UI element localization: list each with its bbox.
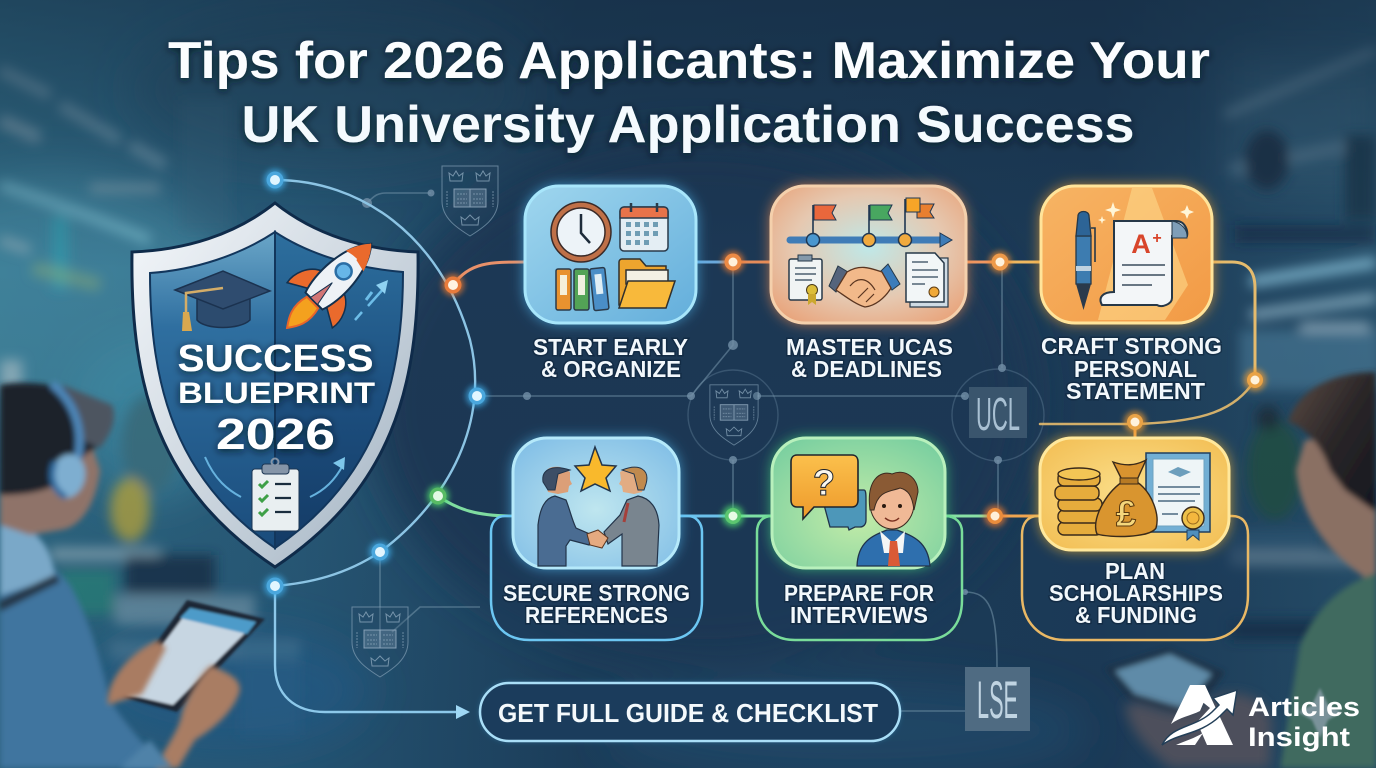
label: INTERVIEWS xyxy=(790,602,928,628)
label: STATEMENT xyxy=(1066,378,1205,404)
icon: handshake xyxy=(829,264,900,307)
label: & ORGANIZE xyxy=(541,356,681,382)
student right with tablet xyxy=(1105,372,1376,768)
label: START EARLY xyxy=(533,334,688,360)
spotlight xyxy=(1098,188,1188,320)
ring nodes xyxy=(264,169,1266,597)
label xyxy=(784,580,934,628)
icon: clock xyxy=(551,202,611,262)
logo: articles insight: Insight xyxy=(1248,722,1350,752)
crest: top xyxy=(442,166,498,236)
logo mark xyxy=(1162,685,1237,745)
shield text xyxy=(178,338,375,459)
icon: clipboard with seal xyxy=(789,255,822,305)
shield ring arc xyxy=(275,180,475,586)
icon: speech bubbles: ? xyxy=(813,462,835,503)
label: REFERENCES xyxy=(525,602,668,628)
panel: references xyxy=(491,438,702,640)
icon: graduation cap xyxy=(175,271,270,331)
shield text: 2026 xyxy=(216,410,335,459)
label xyxy=(1049,558,1223,628)
label: SECURE STRONG xyxy=(503,580,690,606)
icon: certificate scroll: + xyxy=(1152,230,1162,247)
logo box: UCL: UCL xyxy=(976,388,1020,440)
icon: coins xyxy=(1055,468,1102,535)
logo: articles insight: Articles xyxy=(1248,692,1360,722)
icon: interview candidate xyxy=(857,472,930,566)
panel: start early xyxy=(525,186,696,382)
label: & DEADLINES xyxy=(791,356,942,382)
icon: rocket xyxy=(264,221,394,351)
title: UK University Application Success xyxy=(242,96,1134,154)
shield badge xyxy=(132,203,418,567)
icon: speech bubbles xyxy=(791,455,866,530)
label: SCHOLARSHIPS xyxy=(1049,580,1223,606)
circuit connectors xyxy=(275,180,1255,719)
panel: scholarships xyxy=(1022,438,1248,640)
label xyxy=(1041,333,1222,404)
student left with tablet xyxy=(0,383,265,768)
icon: folder xyxy=(619,259,675,308)
panel: interviews xyxy=(757,438,962,640)
logo: articles insight xyxy=(1162,685,1360,752)
icon: pen xyxy=(1076,212,1095,310)
label: PLAN xyxy=(1105,558,1165,584)
label: PREPARE FOR xyxy=(784,580,934,606)
title: Tips for 2026 Applicants: Maximize Your xyxy=(168,32,1210,90)
label: & FUNDING xyxy=(1075,602,1197,628)
crest: lower xyxy=(352,607,408,677)
icon: certificate xyxy=(1146,453,1210,540)
icon: certificate scroll: A xyxy=(1131,229,1151,259)
button: get full guide xyxy=(480,683,900,741)
button: get full guide: GET FULL GUIDE & CHECKLIST xyxy=(498,698,878,728)
icon: certificate scroll xyxy=(1100,221,1187,306)
label xyxy=(786,334,953,382)
icon: timeline flags xyxy=(790,198,952,247)
shield text: SUCCESS xyxy=(178,338,374,380)
label xyxy=(533,334,688,382)
icon: documents xyxy=(906,253,948,307)
logo box: LSE: LSE xyxy=(977,671,1018,730)
text frame xyxy=(1022,516,1248,640)
title xyxy=(168,32,1210,154)
background sparkle xyxy=(1298,688,1342,738)
logo box: UCL xyxy=(969,387,1027,440)
icon: binders xyxy=(556,267,609,311)
panel: master ucas xyxy=(771,186,966,382)
label: PERSONAL xyxy=(1074,356,1197,382)
logo box: LSE xyxy=(965,667,1030,731)
icon: rising arrow xyxy=(355,280,388,320)
label: CRAFT STRONG xyxy=(1041,333,1222,359)
crest: center xyxy=(710,385,758,445)
icon: money bag: £ xyxy=(1116,493,1136,534)
icon: calendar xyxy=(620,203,668,251)
icon: checklist xyxy=(252,458,299,531)
shield text: BLUEPRINT xyxy=(178,377,375,410)
panel: personal statement xyxy=(1041,186,1222,404)
label: MASTER UCAS xyxy=(786,334,953,360)
text frame xyxy=(491,516,702,640)
arrow to button xyxy=(456,705,470,719)
icon: star xyxy=(575,447,616,491)
text frame xyxy=(757,516,962,640)
icon: money bag xyxy=(1096,460,1157,536)
label xyxy=(503,580,690,628)
icon: two people shaking hands xyxy=(538,467,659,566)
